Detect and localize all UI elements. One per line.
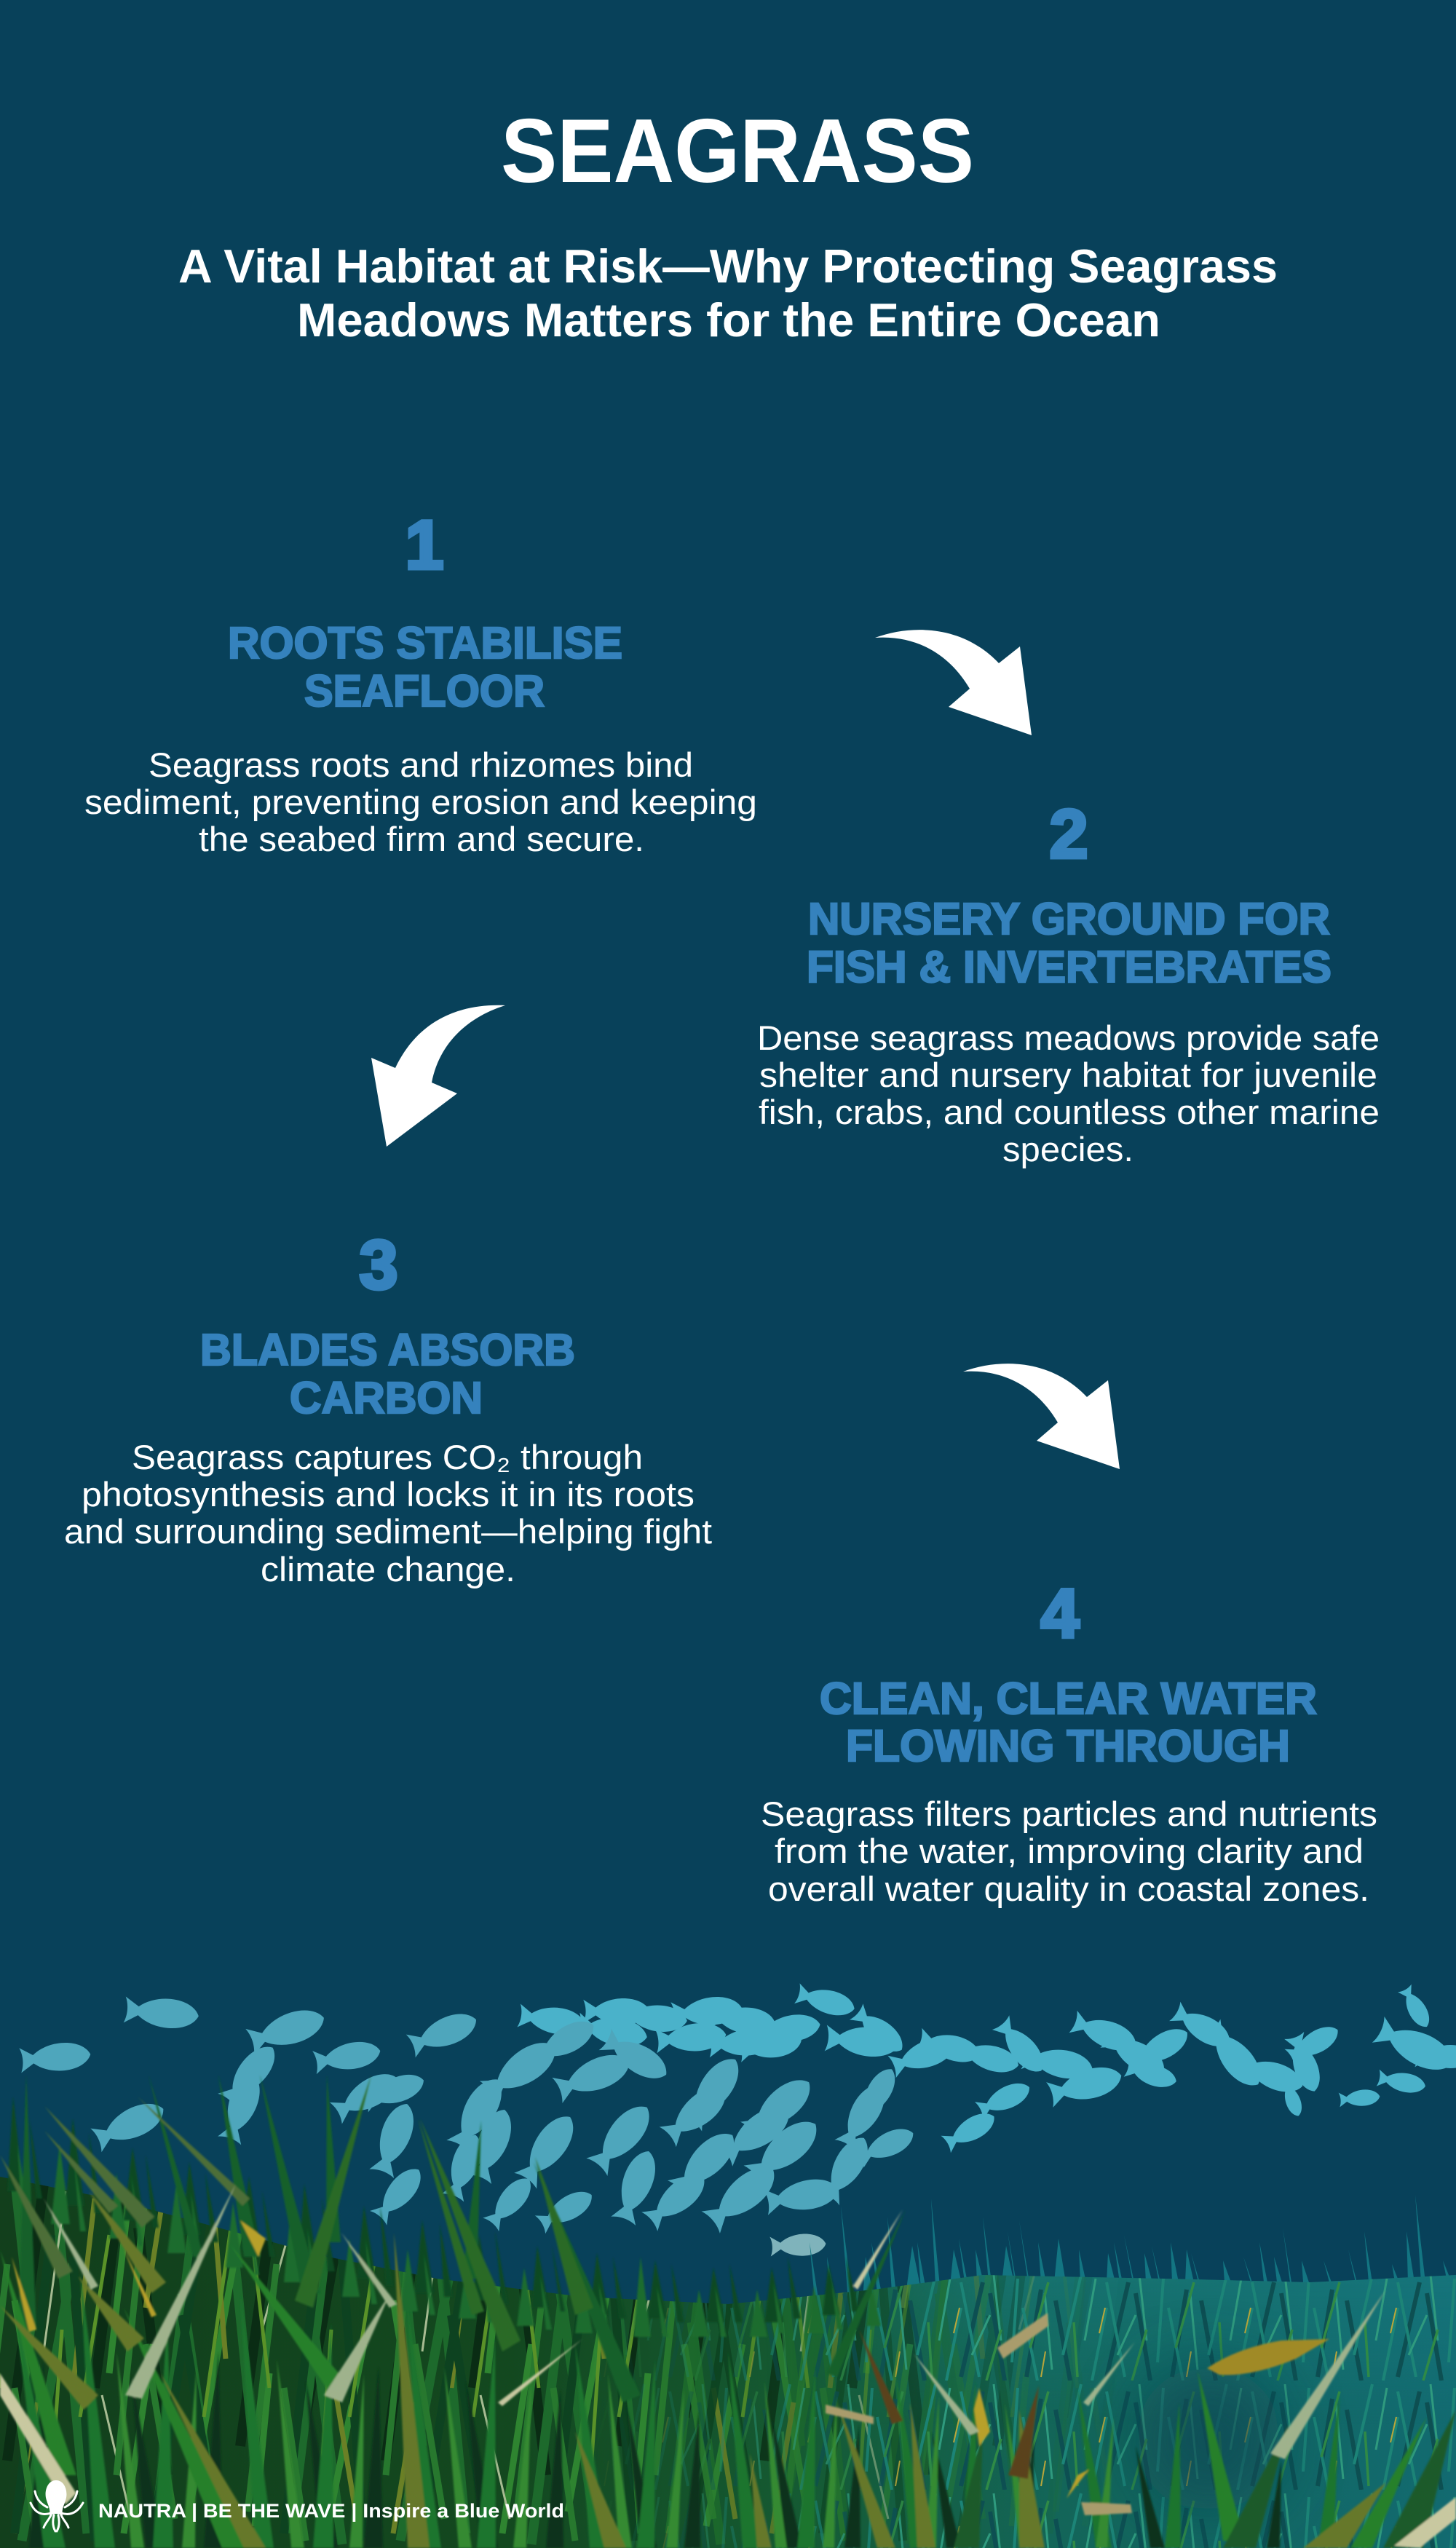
pale highlight blades <box>44 2184 1386 2459</box>
heading: step 2 <box>807 894 1332 992</box>
heading: step 2: NURSERY GROUND FOR <box>808 894 1330 943</box>
far teal fringe <box>810 2195 1452 2308</box>
gold seed blade <box>1207 2339 1329 2375</box>
body text: step 4 <box>761 1795 1377 1908</box>
left and mid horizon comb, dark <box>7 2097 859 2322</box>
heading: step 3 <box>200 1325 575 1423</box>
body text: step 1 <box>84 745 757 858</box>
body text: step 3: and surrounding sediment—helping fight <box>64 1512 712 1551</box>
heading: step 4: FLOWING THROUGH <box>846 1721 1290 1770</box>
heading: step 4 <box>820 1674 1317 1770</box>
body text: step 2: fish, crabs, and countless other marine <box>759 1093 1380 1131</box>
heading: step 1 <box>228 618 622 716</box>
title: SEAGRASS <box>501 101 974 202</box>
step number 2: 2 <box>1050 796 1088 873</box>
yellow accents <box>12 2220 1089 2498</box>
heading: step 3: BLADES ABSORB <box>200 1325 575 1374</box>
grey-green leaning blades <box>0 2097 250 2279</box>
panel: step 1 roots stabilise seafloor <box>84 507 757 858</box>
panel: step 4 clean clear water <box>761 1575 1377 1908</box>
panel: step 3 blades absorb carbon <box>64 1227 712 1588</box>
footer brand text: NAUTRA | BE THE WAVE | Inspire a Blue World <box>98 2500 564 2522</box>
body text: step 2: species. <box>1002 1130 1133 1168</box>
arrow: step 3 to step 4 <box>963 1364 1120 1469</box>
heading: step 2: FISH & INVERTEBRATES <box>807 942 1332 992</box>
body text: step 4: overall water quality in coastal zones. <box>768 1870 1369 1908</box>
footer logo: octopus icon <box>31 2480 83 2531</box>
illustration: seagrass meadow <box>0 2075 1456 2548</box>
tan seed blades <box>826 2313 1132 2515</box>
arrow: step 2 to step 3 <box>371 1005 505 1147</box>
illustration: school of fish <box>19 1982 1456 2258</box>
body text: step 3: climate change. <box>261 1550 515 1588</box>
heading: step 3: CARBON <box>290 1373 483 1423</box>
body text: step 3 <box>64 1438 712 1588</box>
body text: step 2 <box>757 1018 1380 1168</box>
panel: step 2 nursery ground <box>757 796 1380 1168</box>
body text: step 2: shelter and nursery habitat for juvenile <box>759 1056 1377 1094</box>
dark-green foreground blades <box>954 2410 1456 2548</box>
olive blades <box>0 2191 1386 2548</box>
broad leaning green blades <box>0 2244 1427 2548</box>
body text: step 2: Dense seagrass meadows provide safe <box>757 1018 1380 1057</box>
heading: step 4: CLEAN, CLEAR WATER <box>820 1674 1317 1723</box>
left and mid horizon comb, green <box>17 2144 881 2337</box>
step number 3: 3 <box>360 1227 397 1304</box>
arrow: step 1 to step 2 <box>875 630 1032 735</box>
body text: step 1: Seagrass roots and rhizomes bind <box>149 745 693 784</box>
blade layers with soft focus <box>0 2075 1456 2548</box>
bright green blades <box>116 2351 1114 2548</box>
body text: step 3: photosynthesis and locks it in its roots <box>82 1475 695 1514</box>
cream highlight blades <box>0 2209 1456 2548</box>
slim dark blades <box>29 2351 1281 2548</box>
body text: step 1: sediment, preventing erosion and keeping <box>84 783 757 821</box>
tall green blades <box>18 2075 906 2402</box>
heading: step 1: SEAFLOOR <box>304 666 545 716</box>
body text: step 4: Seagrass filters particles and nutrients <box>761 1795 1377 1833</box>
rust blade <box>859 2330 1039 2479</box>
body text: step 1: the seabed firm and secure. <box>199 820 644 858</box>
subtitle: A Vital Habitat at Risk—Why Protecting Seagrass <box>178 240 1278 293</box>
heading: step 1: ROOTS STABILISE <box>228 618 622 668</box>
meadow base <box>0 2155 1456 2548</box>
subtitle <box>178 240 1278 347</box>
mid green blades <box>15 2271 1340 2548</box>
body text: step 4: from the water, improving clarity and <box>775 1832 1364 1870</box>
step number 4: 4 <box>1041 1575 1080 1653</box>
grass texture <box>0 2155 1456 2548</box>
step number 1: 1 <box>405 507 443 584</box>
bright olive-green tall blades <box>295 2075 593 2351</box>
body text: step 3: Seagrass captures CO₂ through <box>132 1438 643 1476</box>
subtitle: Meadows Matters for the Entire Ocean <box>297 293 1160 347</box>
